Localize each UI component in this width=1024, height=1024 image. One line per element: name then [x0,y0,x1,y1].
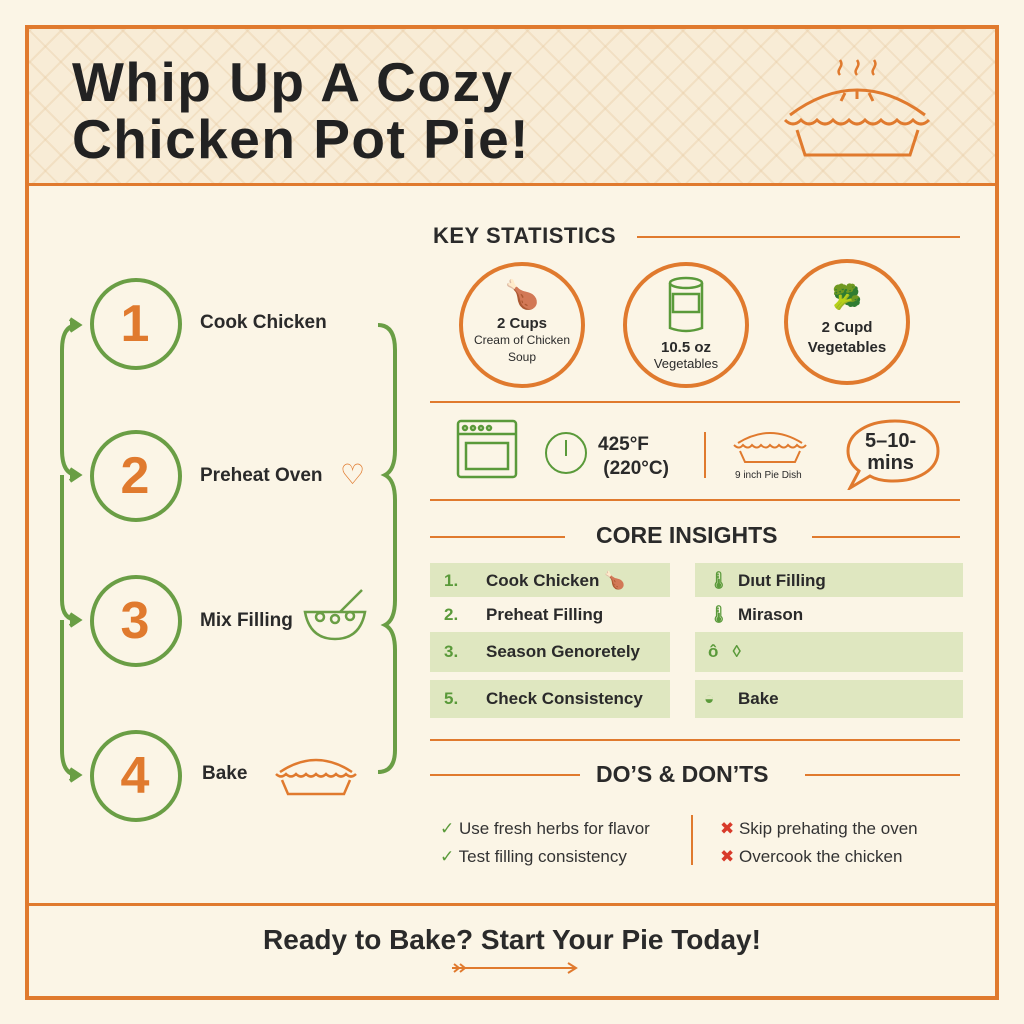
insights table: Mirason [738,605,803,624]
icon: oven [456,420,518,478]
step 1: Cook Chicken [200,312,327,333]
step 2: Preheat Oven [200,465,322,486]
insights table: ô ◊ [708,642,741,661]
stat: cream soup: Soup [508,350,536,364]
insights table: 3. [444,642,458,661]
donts list [720,819,918,866]
step 4: Bake [202,763,247,784]
step 2 [90,430,365,522]
heading: dos and donts: DO’S & DON’TS [596,761,769,787]
title: Whip Up A Cozy [72,51,514,113]
pie dish: 9 inch Pie Dish [735,470,802,481]
footer call to action: Ready to Bake? Start Your Pie Today! [263,924,761,955]
temperature [545,432,669,479]
icon: header pie [784,59,930,156]
dos list: ✓ Use fresh herbs for flavor [440,819,650,838]
stat: cream soup: 🍗 [505,279,539,310]
step 4 [90,730,357,822]
step 4: 4 [121,747,149,805]
insights table: Check Consistency [486,689,643,708]
callout: time [846,420,940,490]
step 1: 1 [121,295,149,353]
title [72,51,530,170]
insights table: Bake [738,689,779,708]
stat: cream soup [459,262,585,388]
step 2: ♡ [340,459,365,490]
donts list: ✖ Skip prehating the oven [720,819,918,838]
stat: vegetables: 2 Cupd [822,319,872,336]
title: Chicken Pot Pie! [72,108,530,170]
insights table: ◒ [704,689,714,708]
insights table: 🌡 [708,571,730,590]
temperature: (220°C) [603,458,669,479]
temperature: 425°F [598,434,649,455]
steps connector [60,317,397,783]
insights table: Dıut Filling [738,571,826,590]
stat: cream soup: 2 Cups [497,315,547,332]
step 3: 3 [121,592,149,650]
donts list: ✖ Overcook the chicken [720,847,902,866]
insights table: 🌡 [708,605,730,624]
step 1 [90,278,327,370]
stat: vegetables [784,259,910,385]
step 2: 2 [121,447,149,505]
dos list: ✓ Test filling consistency [440,847,627,866]
stat: can: Vegetables [654,356,718,371]
pie dish [733,432,807,481]
insights table: Season Genoretely [486,642,640,661]
step 3: Mix Filling [200,610,293,631]
callout: time: 5–10- [865,430,916,452]
step 3 [90,575,366,667]
stat: vegetables: 🥦 [832,284,862,311]
stat: vegetables: Vegetables [808,339,886,356]
stat: can [623,262,749,388]
arrow [452,962,578,974]
insights table: 5. [444,689,458,708]
callout: time: mins [867,452,914,474]
insights table: 2. [444,605,458,624]
dos list [440,819,650,866]
heading: core insights: CORE INSIGHTS [596,522,777,548]
insights table: 1. [444,571,458,590]
insights table [430,563,963,718]
insights table: Preheat Filling [486,605,603,624]
header band [27,27,997,185]
stat: can: 10.5 oz [661,339,711,356]
stat: cream soup: Cream of Chicken [474,333,570,347]
heading: key statistics: KEY STATISTICS [433,223,616,248]
insights table: Cook Chicken 🍗 [486,571,625,590]
